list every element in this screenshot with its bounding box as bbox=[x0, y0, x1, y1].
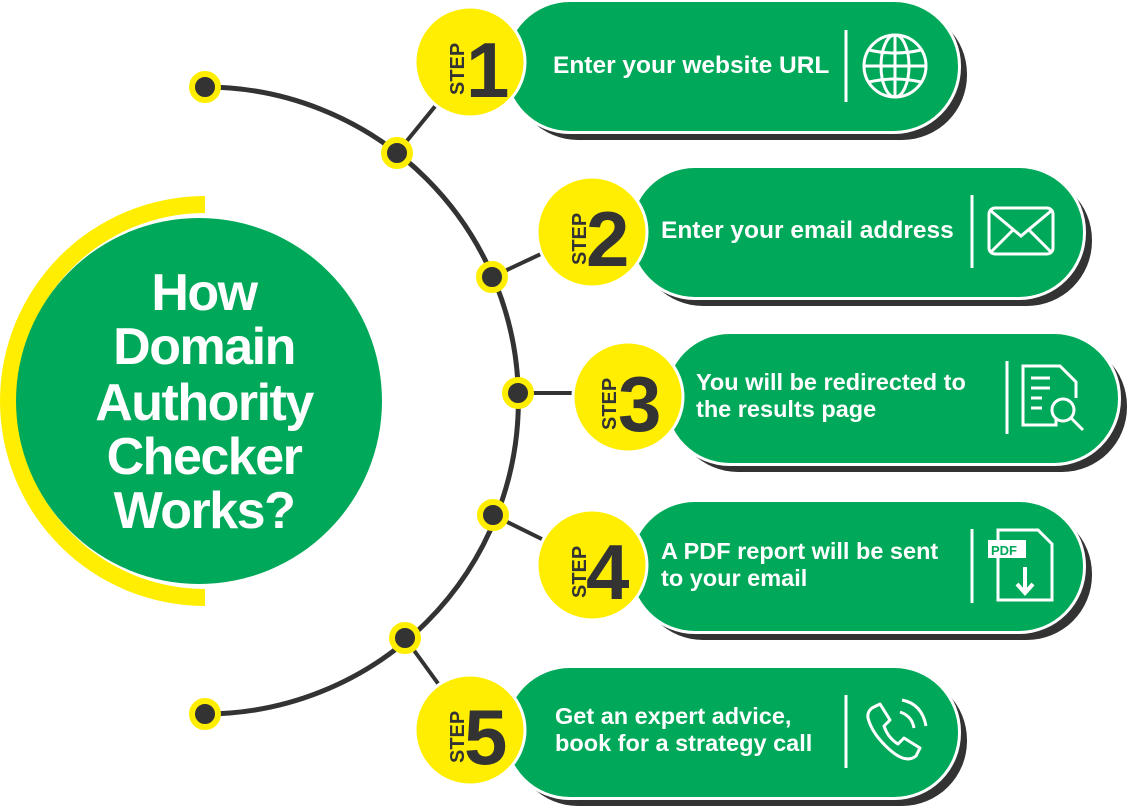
icon: globe bbox=[864, 35, 926, 97]
step 3: the results page bbox=[696, 396, 876, 422]
step 4: to your email bbox=[661, 565, 807, 591]
step 1: STEP bbox=[447, 43, 469, 95]
central arc connector line bbox=[205, 87, 590, 714]
step 5: Get an expert advice, bbox=[555, 703, 791, 729]
icon: envelope bbox=[989, 208, 1053, 254]
arc dots bbox=[192, 74, 531, 727]
title text: Checker bbox=[107, 428, 303, 486]
step 5: book for a strategy call bbox=[555, 730, 812, 756]
step 3 bbox=[573, 331, 1127, 472]
step 4 bbox=[537, 499, 1092, 640]
step 4: 4 bbox=[586, 528, 629, 616]
step 2 bbox=[537, 165, 1092, 306]
title text: Works? bbox=[114, 482, 294, 540]
icon: phone bbox=[868, 700, 926, 759]
icon: pdf download: PDF bbox=[991, 543, 1017, 558]
step 2: STEP bbox=[569, 213, 591, 265]
icon: pdf download bbox=[988, 530, 1052, 600]
step 5 bbox=[415, 665, 967, 806]
icon: document search bbox=[1023, 366, 1083, 430]
step 2: 2 bbox=[586, 195, 629, 283]
step 3: STEP bbox=[599, 378, 621, 430]
step 1: 1 bbox=[466, 26, 509, 114]
step 5: STEP bbox=[447, 711, 469, 763]
step 1 bbox=[415, 0, 967, 140]
title text: Authority bbox=[95, 374, 314, 432]
step 3: 3 bbox=[618, 360, 661, 448]
title text: How bbox=[151, 264, 259, 322]
title circle bbox=[0, 196, 382, 606]
step 4: STEP bbox=[569, 546, 591, 598]
title text: Domain bbox=[113, 318, 295, 376]
step 3: You will be redirected to bbox=[696, 369, 966, 395]
title text bbox=[95, 264, 314, 540]
step 5: 5 bbox=[464, 693, 507, 781]
step 4: A PDF report will be sent bbox=[661, 538, 938, 564]
step 1: Enter your website URL bbox=[553, 52, 829, 79]
step 2: Enter your email address bbox=[661, 217, 954, 244]
